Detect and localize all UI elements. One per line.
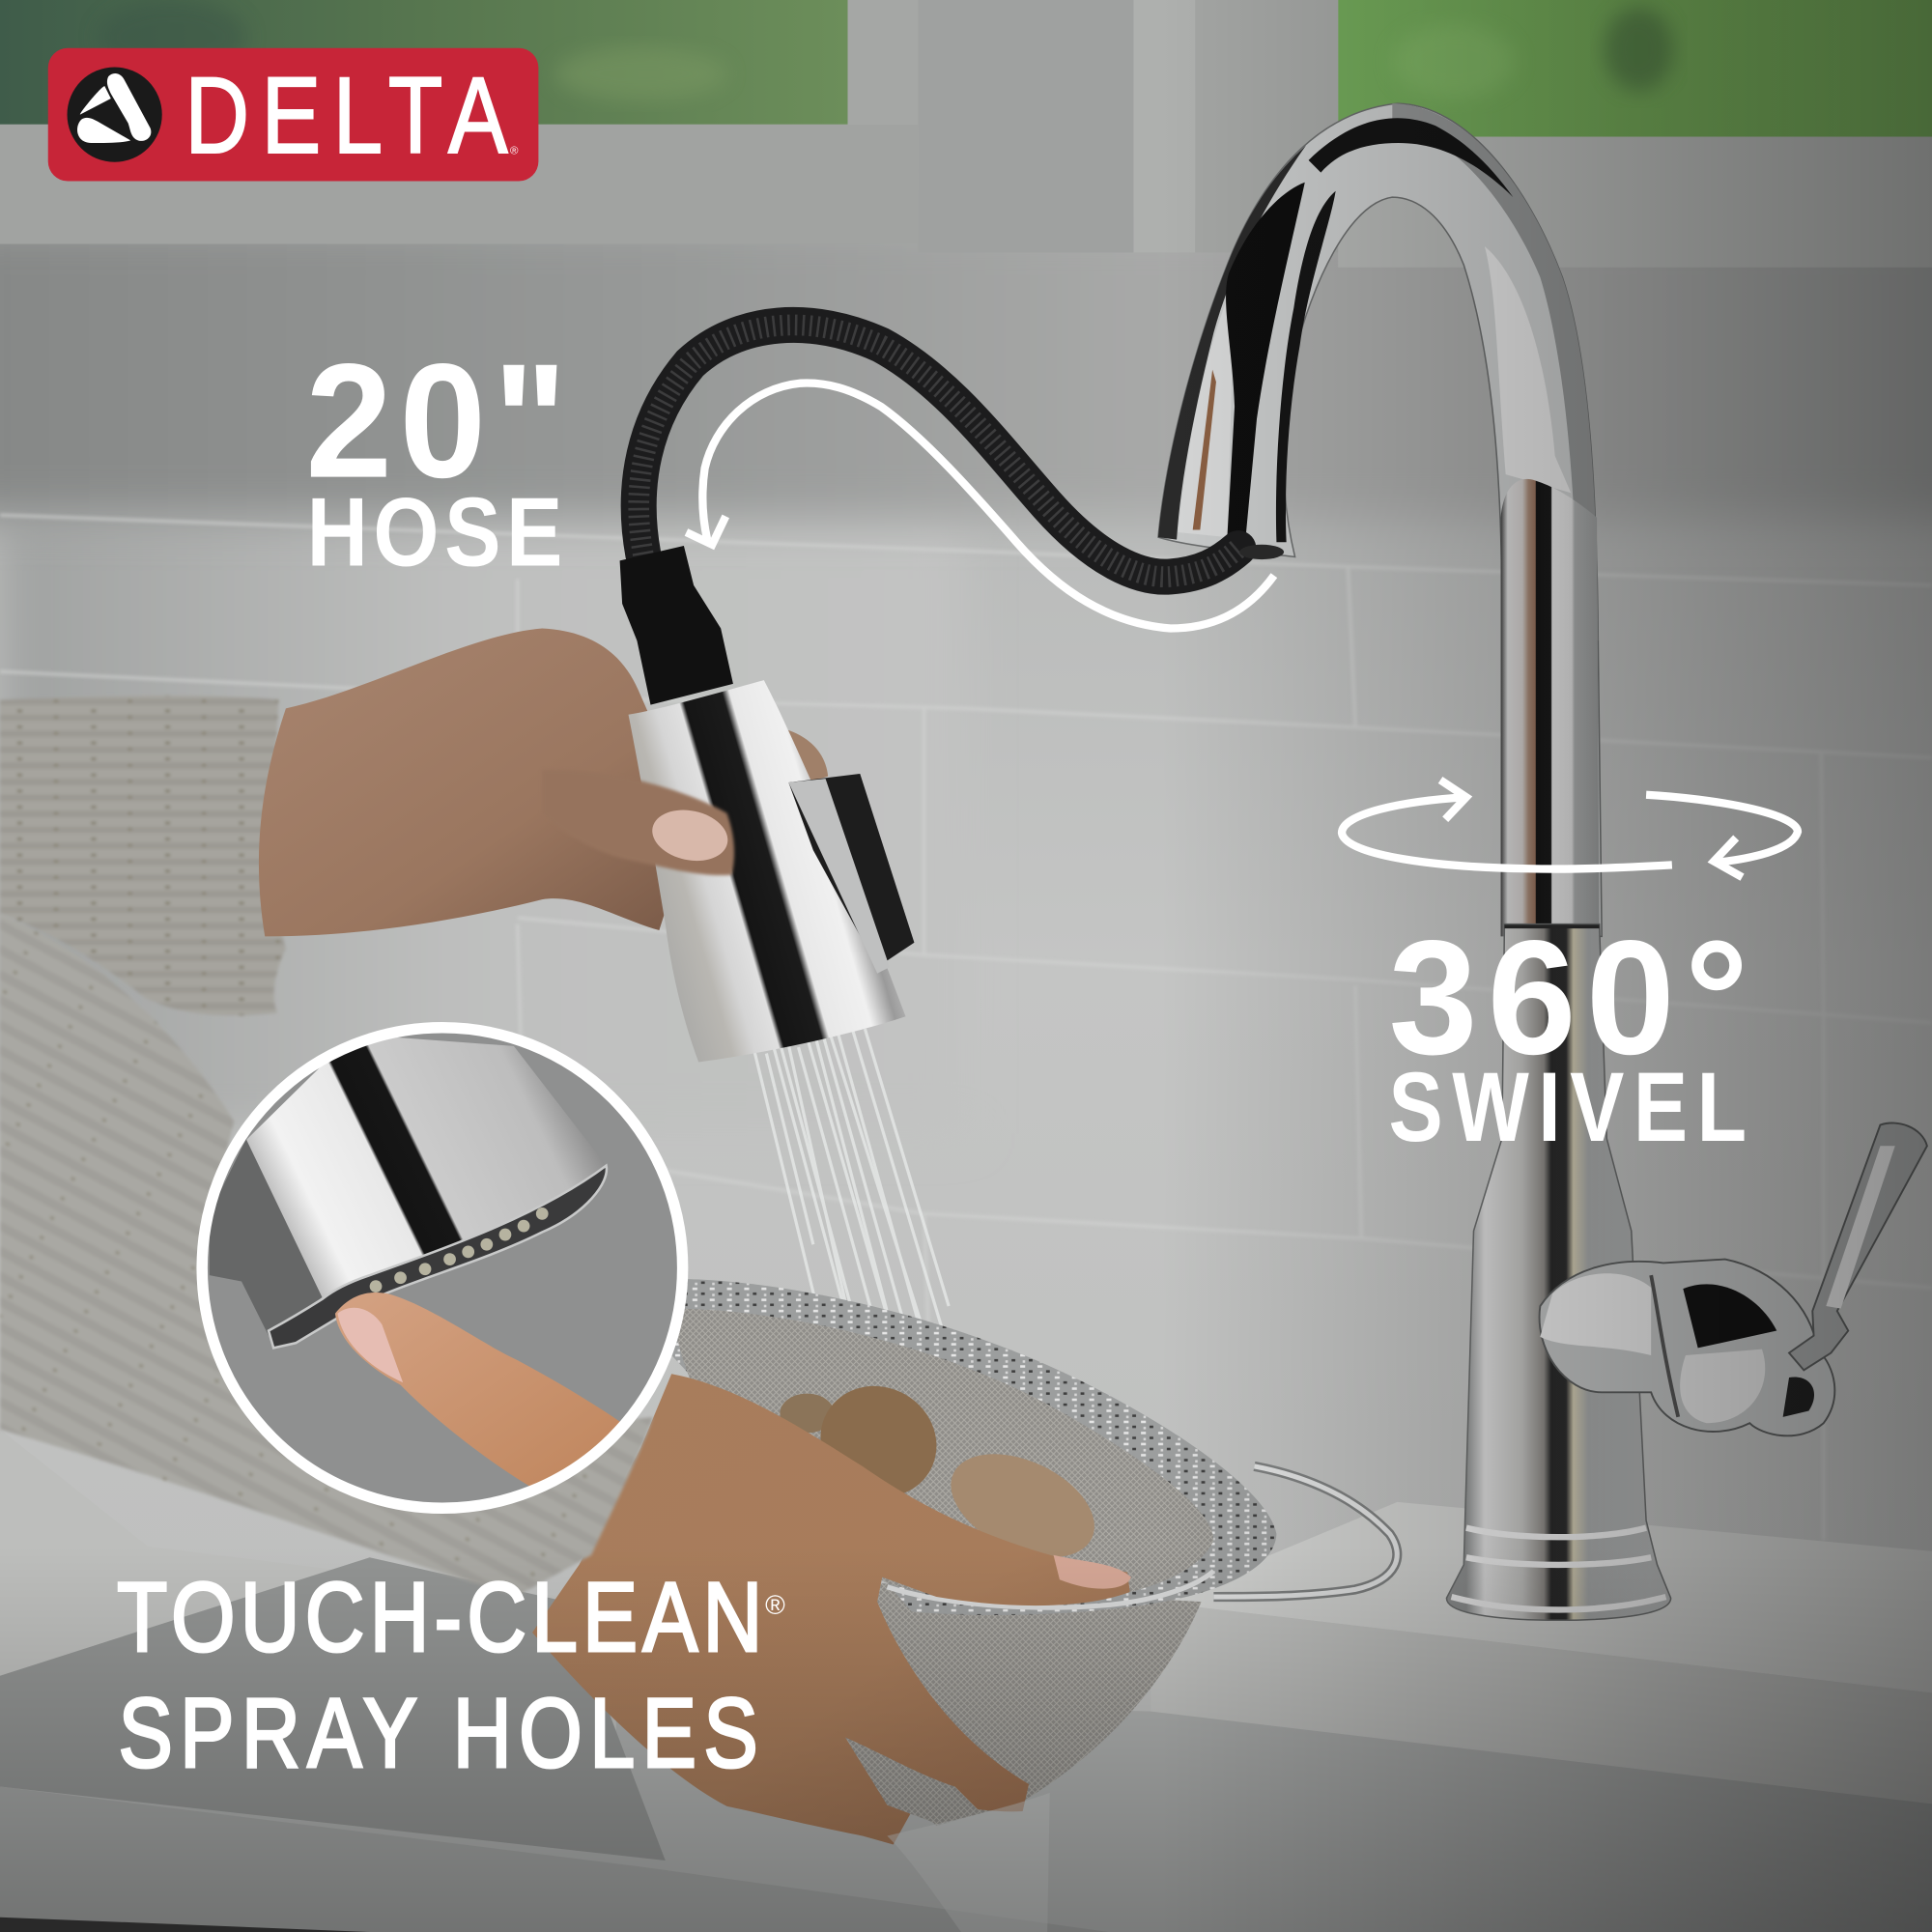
nozzle rim (269, 1166, 607, 1348)
callout: 20 inch hose: 20" (305, 330, 574, 512)
inset ring (202, 1028, 683, 1508)
callout: touch-clean spray holes: SPRAY HOLES (118, 1678, 765, 1788)
dark side of sprayer (210, 1139, 327, 1346)
arrow: 360 degree swivel (1342, 780, 1798, 877)
colander front rim line (887, 1571, 1213, 1607)
water spray stream (754, 1029, 980, 1454)
countertop ledge with faucet (0, 1502, 1932, 1932)
sprayer: toggle button (788, 774, 914, 974)
logo registered mark: ® (510, 145, 519, 156)
faucet: body, base and lever handle (1446, 924, 1927, 1620)
pull-down hose (639, 325, 1238, 577)
faucet collar detail (1504, 925, 1600, 928)
logo wordmark: DELTA (185, 54, 520, 176)
lever highlight (1826, 1146, 1895, 1309)
base rings (1452, 1528, 1665, 1609)
sprayer: chrome head (629, 680, 906, 1062)
window view: left greenery (0, 0, 848, 125)
window view: right greenery (1338, 0, 1932, 137)
callout: touch-clean spray holes: TOUCH-CLEAN (117, 1562, 768, 1672)
callout: 360 swivel: SWIVEL (1389, 1052, 1756, 1162)
logo: Delta badge (48, 48, 538, 181)
arrow: hose reach (686, 384, 1274, 629)
potatoes (780, 1365, 1111, 1578)
fingernail (337, 1308, 403, 1382)
colander handle (1213, 1466, 1397, 1597)
logo circle mark (68, 68, 162, 162)
callout: touch-clean spray holes: ® (765, 1590, 785, 1620)
button chrome frame (788, 779, 890, 974)
spout reflections (1158, 103, 1600, 936)
window frame (0, 0, 1932, 268)
fingernail: lower hand (1054, 1555, 1131, 1589)
sprayer: black hose connector (620, 546, 733, 705)
chrome nozzle (246, 1035, 607, 1298)
colander mesh behind fingers (845, 1737, 980, 1824)
hose braid texture (639, 325, 1238, 577)
callout: 20 inch hose (305, 330, 574, 586)
neck column (1501, 479, 1600, 936)
fingertip (335, 1293, 622, 1493)
subway tile joints (0, 515, 1932, 1540)
touch-clean nubs (370, 1208, 549, 1293)
callout: touch-clean spray holes (117, 1562, 785, 1788)
handle hub (1540, 1260, 1834, 1435)
lever handle (1789, 1122, 1927, 1370)
colander inner mesh (671, 1309, 1213, 1603)
callout: 20 inch hose: HOSE (307, 478, 568, 586)
sink basin and lower counter (0, 1430, 1109, 1932)
faucet: chrome gooseneck spout (1158, 103, 1602, 936)
sweater sleeve forearm (0, 914, 653, 1596)
inset: touch-clean spray holes close-up (202, 1028, 683, 1508)
colander rim (671, 1279, 1276, 1615)
callout: 360 swivel: 360° (1389, 907, 1758, 1089)
finger behind sprayer (777, 727, 828, 788)
fingernail: upper hand (647, 804, 732, 867)
colander lower bowl (850, 1583, 1202, 1826)
lower hand holding colander (532, 1374, 1130, 1844)
spout outlet (1239, 545, 1284, 559)
water dripping below colander (887, 1793, 1050, 1932)
finger wrapped over sprayer (542, 770, 734, 875)
upper hand holding sprayer (259, 629, 715, 936)
hub reflections (1540, 1273, 1814, 1423)
sweater cuff (0, 696, 286, 1015)
colander: bowl, rim and handle (671, 1279, 1397, 1826)
